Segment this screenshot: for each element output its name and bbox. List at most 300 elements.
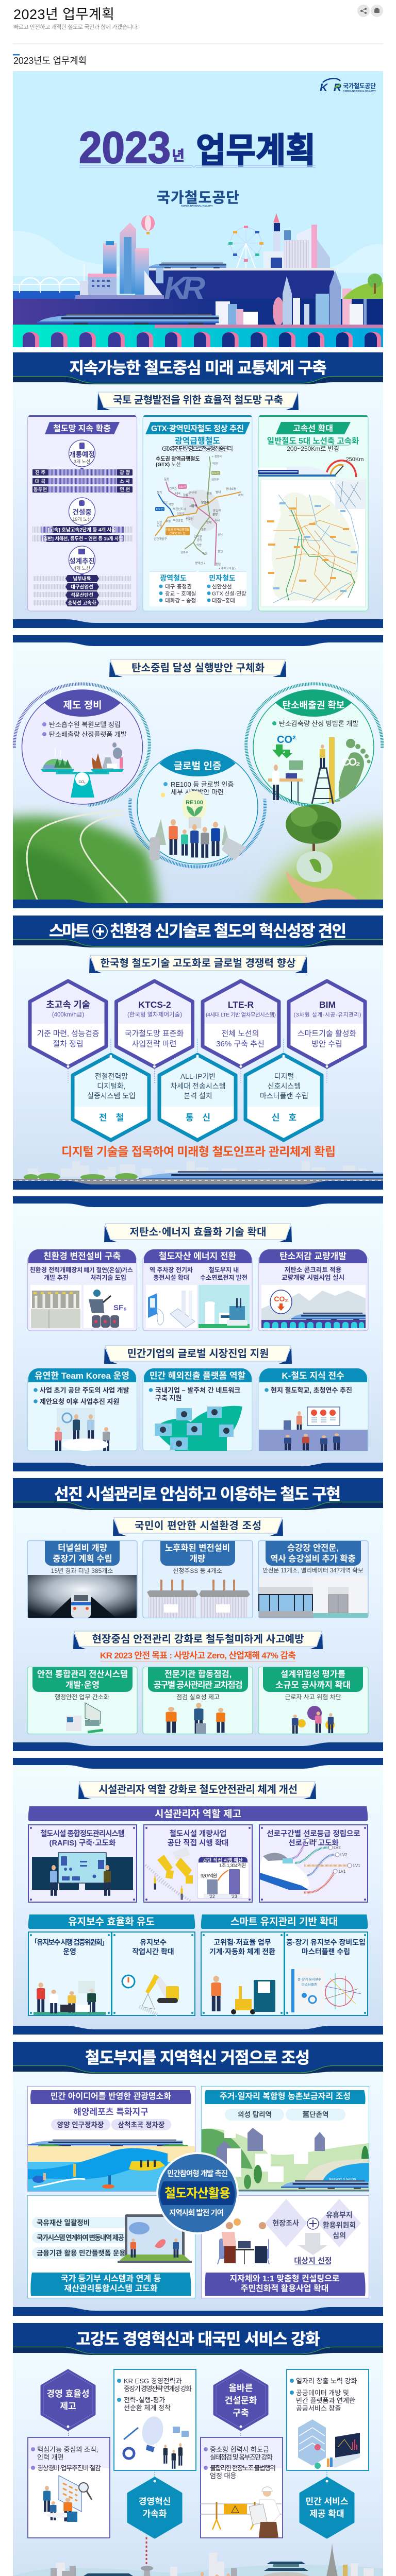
hexagon: signalling: 신호시스템 — [268, 1082, 301, 1090]
map: GTX routes: 마석 — [238, 493, 243, 497]
panel: K-rail knowledge transfer: 현지 철도학교, 초청연수 추진 — [271, 1386, 352, 1394]
map: GTX routes: + 수서고속철도 — [219, 566, 237, 570]
panel: substation: 노후화된 변전설비 — [165, 1543, 230, 1553]
hexagon: BIM: 방안 수립 — [311, 1040, 342, 1048]
hexagon: construction culture: 구축 — [233, 2408, 249, 2418]
illustration: consulting — [218, 2218, 269, 2264]
panel: substation — [143, 1540, 253, 1618]
panel: idle land consulting — [201, 2196, 369, 2298]
illustration: RE100 people — [150, 791, 246, 860]
hexagon: KTCS-2: (한국형 열차제어기술) — [127, 1011, 182, 1018]
ribbon heading — [97, 392, 299, 410]
badge: scheduled opening — [69, 440, 95, 470]
panel: safety system: 개발·운영 — [65, 1680, 100, 1690]
panel: rail asset energy: 철도부지 내 — [209, 1266, 239, 1274]
hexagon: construction culture: 건설문화 — [225, 2396, 257, 2405]
panel: GTX and metropolitan rail: GTX추진단 운영으로 전공정 집중관리 — [162, 445, 233, 452]
illustration: worker and machine — [211, 1976, 275, 2014]
construction bars — [32, 526, 133, 542]
icon: share button — [357, 5, 370, 17]
hexagon: KTCS-2: 사업전략 마련 — [132, 1040, 176, 1048]
illustration: bulb and gear — [124, 2414, 189, 2469]
map: GTX routes: 연신내 — [189, 490, 196, 495]
panel: direct improvement: 철도시설 개량사업 — [170, 1829, 226, 1838]
ribbon heading: 한국형 철도기술 고도화로 글로벌 경쟁력 향상 — [100, 957, 296, 969]
central badge: rail asset utilisation: 민간참여형 개발 촉진 — [167, 2170, 228, 2178]
panel: design risk assessment: 소규모 공사까지 확대 — [275, 1680, 351, 1690]
route bars: 진 주 — [35, 470, 45, 476]
box: ESG strategy: 전략-실행-평가 — [124, 2396, 165, 2404]
panel: marine leisure — [28, 2087, 195, 2192]
list: metropolitan and private rail: 신안산선 — [212, 584, 232, 590]
map: GTX routes: 왕십리 — [213, 509, 221, 513]
hexagon: innovation: 가속화 — [143, 2509, 167, 2519]
illustration: master plan book: 중·장기 유지보수 — [298, 1977, 321, 1981]
hexagon: private service: 민간 서비스 — [306, 2497, 348, 2506]
illustration: analysts — [43, 2476, 92, 2522]
panel: safety system — [27, 1667, 137, 1734]
map: GTX routes: 의정부 — [211, 478, 219, 482]
illustration: risk gears — [292, 1706, 335, 1734]
panel: master plan — [285, 1932, 368, 2015]
illustration: SF6 handling: SF₆ — [113, 1303, 127, 1312]
map: GTX routes: + 청량리 — [212, 454, 222, 459]
map: GTX routes: 인천대입구 — [154, 537, 167, 541]
sub heading: 2023년도 업무계획 — [13, 56, 87, 66]
illustration: city and trains: KR — [164, 270, 205, 306]
hexagon: electrification: 전철전력망 — [95, 1072, 128, 1080]
section: rail land as regional hub — [13, 2042, 383, 2316]
list: metropolitan and private rail: 광교 ~ 호매실 — [165, 590, 196, 597]
diamonds: site survey and committee — [265, 2199, 361, 2247]
hexagon: construction culture: 올바른 — [229, 2383, 253, 2393]
panel: work hours — [112, 1932, 195, 2015]
list: metropolitan and private rail: GTX 신설·연장 — [212, 590, 246, 597]
purple bar heading — [28, 1806, 368, 1821]
teal bar: smart maintenance: 스마트 유지관리 기반 확대 — [230, 1916, 338, 1927]
caption bar — [205, 2273, 366, 2296]
ribbon heading: 현장중심 안전관리 강화로 철두철미하게 사고예방 — [92, 1633, 304, 1645]
badge: design in progress: 4개 노선 — [74, 566, 90, 571]
ribbon heading — [109, 659, 286, 677]
panel: joint inspections: 전문기관 합동점검, — [164, 1669, 232, 1679]
list: metropolitan and private rail: 민자철도 — [209, 574, 236, 582]
list: metropolitan and private rail — [150, 571, 246, 606]
hexagon: LTE-R: 36% 구축 추진 — [216, 1040, 265, 1048]
panel: design risk assessment: 설계위험성 평가를 — [280, 1669, 345, 1679]
illustration: laptop and surveyors — [118, 2214, 192, 2263]
logo: KR — [320, 78, 376, 94]
panel: institution: 탄소흡수원 복원모델 정립 — [49, 721, 121, 728]
hexagon: LTE-R: LTE-R — [228, 999, 254, 1010]
hexagon: LTE-R: 전체 노선의 — [221, 1029, 259, 1038]
section: carbon neutrality — [0, 635, 396, 917]
diamonds: site survey and committee: 심의 — [333, 2231, 346, 2240]
illustration: lecture — [259, 1407, 368, 1451]
hexagon: ultra high speed: (400km/h급) — [52, 1012, 84, 1018]
bar chart: direct budget — [197, 1857, 249, 1899]
panel: marine leisure: 양양 인구정차장 — [57, 2121, 104, 2129]
construction bars: [일반] 서해선, 동두천 ~ 연천 등 15개 사업 — [42, 536, 123, 541]
hero title — [79, 123, 316, 173]
box: public data: 공공서비스 창출 — [296, 2404, 341, 2412]
route bars: 대 곡 — [35, 478, 45, 484]
design routes: 대구산업선 — [71, 584, 93, 590]
panel: carbon credits: 탄소배출권 확보 — [283, 700, 344, 710]
box: ESG strategy: 선순환 체계 정착 — [124, 2404, 171, 2412]
box: ESG strategy: 중장기 경영전략 연계성 강화 — [124, 2385, 192, 2393]
illustration: crane — [122, 1974, 179, 2014]
hexagon: KTCS-2 — [117, 981, 193, 1067]
illustration: station — [259, 1576, 368, 1618]
section heading: 지속가능한 철도중심 미래 교통체계 구축 — [69, 359, 327, 377]
panel: high speed expansion: 일반철도 5대 노선축 고속화 — [267, 436, 359, 446]
diamonds: site survey and committee: 유휴부지 — [326, 2211, 353, 2219]
box: subcontract: 중소형 협력사 하도급 — [210, 2446, 269, 2453]
hexagon: signalling: 신 호 — [272, 1113, 296, 1123]
illustration: beach — [28, 2140, 195, 2191]
panel: eco substation: 개발 추진 — [44, 1274, 69, 1281]
section heading: 철도부지를 지역혁신 거점으로 조성 — [85, 2049, 310, 2067]
box: public data: 일자리 창출 노력 강화 — [296, 2377, 357, 2385]
panel: global certification — [137, 750, 258, 864]
ribbon heading — [113, 1517, 283, 1536]
panel: joint inspections — [143, 1667, 253, 1734]
rail rings — [14, 684, 382, 867]
panel: team Korea: 사업 초기 공단 주도의 사업 개발 — [40, 1386, 129, 1394]
ribbon heading — [104, 1346, 292, 1364]
map: GTX routes: 수도권 광역급행철도 — [165, 528, 190, 532]
hexagon: ultra high speed: 초고속 기술 — [46, 999, 90, 1010]
central badge: rail asset utilisation: 지역사회 발전 기여 — [169, 2209, 224, 2217]
panel: tunnel: 중장기 계획 수립 — [53, 1554, 112, 1564]
route bars: 소 사 — [120, 478, 130, 484]
badge: scheduled opening: 개통예정 — [69, 451, 95, 459]
hexagon: BIM: (3차원 설계-시공-유지관리) — [294, 1012, 361, 1018]
hexagon: KTCS-2: KTCS-2 — [138, 999, 171, 1010]
illustration: CO2 footprint — [268, 734, 370, 804]
right towers — [263, 213, 330, 268]
ribbon heading: 탄소중립 달성 실행방안 구체화 — [131, 662, 265, 674]
hexagon: BIM: 스마트기술 활성화 — [298, 1029, 356, 1038]
map: GTX routes: 여의도 — [177, 512, 185, 516]
section: facility manager role — [13, 1758, 383, 2035]
diamonds: site survey and committee: 활용위원회 — [323, 2221, 356, 2229]
hexagon: LTE-R — [203, 981, 279, 1067]
ribbon heading: 국토 균형발전을 위한 효율적 철도망 구축 — [113, 394, 283, 406]
map: GTX routes: 평택선 + — [195, 561, 205, 565]
map: GTX routes: 상록수 — [180, 550, 188, 554]
list: metropolitan and private rail: 광역철도 — [160, 574, 187, 582]
map: GTX routes: 계양 — [169, 502, 174, 506]
illustration: CO2 footprint: CO₂ — [342, 756, 360, 768]
map: GTX routes: 창동 — [207, 492, 212, 496]
illustration: site engineer and barrier — [201, 2487, 282, 2538]
box: organisation: 핵심기능 중심의 조직, — [37, 2446, 98, 2453]
panel: eco substation: 친환경 변전설비 구축 — [43, 1251, 121, 1261]
hill and trees — [343, 274, 383, 299]
panel: tunnel — [27, 1540, 137, 1618]
panel: substation: 신청주SS 등 4개소 — [173, 1567, 222, 1574]
hexagon: signalling: 마스터플랜 수립 — [260, 1092, 308, 1100]
panel: rural housing: 주거·일자리 복합형 농촌보금자리 조성 — [220, 2092, 351, 2101]
panel: direct improvement: 공단 직접 시행 확대 — [168, 1839, 228, 1848]
teal bar: smart maintenance — [201, 1914, 368, 1929]
map: GTX routes: 삼성 — [212, 512, 218, 516]
illustration: EV charging — [146, 1285, 197, 1328]
map: GTX routes: 검단 — [162, 500, 168, 504]
bar chart: direct budget: '23 — [231, 1894, 237, 1899]
panel: eco substation: 폐기 절연(온실)가스 — [84, 1266, 133, 1274]
design routes: 충북선 고속화 — [68, 600, 96, 606]
section heading: 스마트 — [49, 922, 90, 940]
panel: tunnel: 터널설비 개량 — [58, 1543, 107, 1553]
box: public data — [287, 2369, 369, 2470]
badge: design in progress: 설계추진 — [69, 557, 95, 565]
illustration: city and trains — [13, 213, 383, 347]
panel: track grade: 선로구간별 선로등급 정립으로 — [267, 1829, 360, 1838]
panel: institution: 탄소배출량 산정플랫폼 개발 — [49, 731, 127, 738]
background: tree and globe in hand — [246, 805, 383, 903]
construction bars: [고속] 호남고속2단계 등 4개 사업 — [48, 527, 116, 533]
panel: work hours: 유지보수 — [140, 1938, 167, 1946]
hexagon: LTE-R: (4세대 LTE 기반 열차무선시스템) — [206, 1012, 276, 1018]
box: public data: 민간 플랫폼과 연계한 — [296, 2397, 355, 2404]
panel: work hours: 작업시간 확대 — [132, 1947, 174, 1956]
list: metropolitan and private rail: 대장~홍대 — [212, 597, 235, 604]
panel: marine leisure: 해양레포츠 특화지구 — [73, 2107, 148, 2117]
logo: KR: 국가철도공단 — [343, 82, 376, 90]
panel: maintenance verification committee — [28, 1932, 111, 2015]
map: GTX routes: (GTX) B노선 — [170, 531, 185, 535]
bar chart: direct budget: '22 — [209, 1894, 215, 1899]
illustration: team discussion — [34, 1981, 106, 2015]
illustration: world map — [155, 1406, 242, 1451]
map: GTX routes: 의왕 — [196, 543, 202, 547]
teal bar: maintenance efficiency: 유지보수 효율화 유도 — [68, 1916, 155, 1927]
map: GTX routes — [154, 454, 243, 570]
illustration: CO2 bridge: CO₂ — [274, 1295, 288, 1303]
panel: global certification: 글로벌 인증 — [174, 760, 221, 772]
ribbon heading — [89, 955, 307, 973]
panel: marine leisure: 삼척초곡 정차장 — [118, 2121, 165, 2129]
arches — [23, 332, 381, 347]
panel: overseas platform — [143, 1368, 252, 1451]
organisation name: KOREA NATIONAL RAILWAY — [181, 205, 213, 207]
panel: track grade — [259, 1825, 368, 1902]
panel: eco substation: 친환경 전력개폐장치 — [30, 1266, 82, 1274]
map: GTX routes: 평내호평 — [226, 487, 236, 491]
section heading: 친환경 신기술로 철도의 혁신성장 견인 — [110, 922, 346, 940]
hero title: 업무계획 — [196, 131, 316, 171]
illustration: train and track grades: LV2 — [340, 1853, 348, 1857]
route bars — [32, 469, 133, 493]
badge: design in progress — [69, 546, 95, 576]
map: GTX routes: 수서 — [214, 518, 220, 522]
panel: rural housing — [201, 2087, 369, 2192]
box: subcontract: 실태점검 및 옴부즈만 강화 — [210, 2453, 273, 2461]
map: GTX routes: 운정 — [164, 478, 169, 481]
hexagon: communication: 차세대 전송시스템 — [171, 1082, 225, 1090]
panel: low carbon bridge — [258, 1249, 368, 1331]
panel: asset management system: 국가시스템 연계하여 변동내역 제공 — [37, 2234, 124, 2242]
panel: low carbon bridge: 교량개량 시범사업 실시 — [282, 1274, 344, 1281]
map: GTX routes: 신도림 — [186, 517, 193, 521]
ribbon heading: 민간기업의 글로벌 시장진입 지원 — [127, 1348, 269, 1360]
list: metropolitan and private rail: 태화강 ~ 송정 — [165, 598, 196, 604]
map: GTX routes: 덕정 — [212, 462, 218, 466]
panel: institution — [22, 690, 142, 804]
illustration: train and track grades: LV2 — [334, 1845, 341, 1850]
section heading: 선진 시설관리로 안심하고 이용하는 철도 구현 — [54, 1485, 341, 1503]
hexagon: efficiency: 경영 효율성 — [47, 2389, 89, 2399]
panel: mechanisation — [201, 1932, 284, 2015]
design routes — [33, 575, 131, 606]
panel: design risk assessment: 근로자 사고 위험 차단 — [285, 1693, 341, 1701]
hexagon: ultra high speed — [30, 981, 106, 1067]
map: GTX routes: 용인 — [218, 550, 223, 553]
box: organisation: 인력 개편 — [37, 2453, 63, 2461]
panel: master plan: 중·장기 유지보수 장비도입 — [286, 1938, 366, 1946]
caption bar: 재산관리통합시스템 고도화 — [64, 2284, 158, 2293]
logo: KR: KR — [320, 82, 342, 94]
panel: low carbon bridge: 탄소저감 교량개발 — [279, 1251, 346, 1261]
panel: K-rail knowledge transfer — [258, 1368, 368, 1451]
Lotte tower — [325, 2543, 339, 2576]
map: GTX routes: A노선 — [179, 485, 186, 489]
section: management innovation and public service — [13, 2323, 384, 2576]
panel: maintenance verification committee: 「유지보수 시행 검증위원회」 — [30, 1938, 109, 1946]
panel: track grade: 선로관리 고도화 — [288, 1839, 339, 1848]
purple bar heading: 시설관리자 역할 제고 — [155, 1808, 241, 1820]
illustration: servers and charts — [298, 2419, 360, 2469]
panel: asset management system: 금융기관 활용 민간플랫폼 운용 — [37, 2249, 126, 2257]
section: sustainable rail transport system — [13, 352, 383, 628]
hexagon: efficiency — [42, 2370, 94, 2430]
route bars: 동두천 — [34, 486, 47, 493]
panel: institution: 제도 정비 — [63, 700, 102, 711]
Ferris wheel — [230, 228, 261, 268]
panel: overseas platform: 구축 지원 — [155, 1394, 182, 1402]
travellers — [199, 2572, 236, 2576]
hexagon: BIM: BIM — [319, 999, 336, 1010]
ribbon heading — [73, 1631, 323, 1649]
page subtitle: 빠르고 안전하고 쾌적한 철도로 국민과 함께 가겠습니다. — [13, 23, 139, 30]
badge: scheduled opening: 3개 노선 — [74, 459, 90, 464]
hexagon: efficiency: 제고 — [60, 2401, 76, 2411]
panel: hero cover — [13, 71, 383, 347]
panel: GTX and metropolitan rail: 광역급행철도 — [175, 436, 220, 446]
panel: GTX and metropolitan rail: GTX·광역민자철도 정상 추진 — [151, 424, 244, 433]
panel: RAFIS: (RAFIS) 구축·고도화 — [50, 1839, 116, 1848]
hexagon: construction culture — [214, 2370, 267, 2430]
panel: safety system: 안전 통합관리 전산시스템 — [37, 1669, 128, 1679]
illustration: CO2 footprint: CO² — [277, 734, 296, 745]
logo: KR: KOREA NATIONAL RAILWAY — [343, 90, 376, 92]
hexagon: signalling — [245, 1055, 322, 1140]
panel: rail asset energy: 충전시설 확대 — [153, 1274, 189, 1281]
illustration: green village — [201, 2128, 369, 2191]
box: ESG strategy — [114, 2369, 196, 2470]
map: GTX routes: (GTX) 노선 — [156, 461, 180, 468]
badge: under construction — [69, 498, 95, 528]
panel: rural housing: 의성 탑리역 — [238, 2111, 272, 2119]
map: national rail network — [261, 479, 366, 607]
hexagon: innovation: 경영혁신 — [139, 2497, 171, 2506]
design routes: 석문산단선 — [71, 592, 93, 599]
map: GTX routes: 장기 — [157, 490, 162, 495]
selection label: 대상지 선정 — [294, 2257, 332, 2265]
panel: RAFIS: 철도시설 종합정도관리시스템 — [40, 1829, 125, 1838]
panel: tunnel: 15년 경과 터널 385개소 — [51, 1567, 113, 1574]
illustration: carbon balance — [41, 742, 124, 798]
box: ESG strategy: KR ESG 경영전략과 — [124, 2377, 182, 2385]
illustration: train and track grades — [260, 1838, 360, 1892]
panel: overseas platform: 국내기업 – 발주처 간 네트워크 — [155, 1386, 240, 1394]
panel: high speed expansion — [258, 415, 368, 611]
panel: K-rail knowledge transfer: K-철도 지식 전수 — [282, 1371, 344, 1381]
ribbon heading — [78, 1782, 316, 1799]
hexagon: ultra high speed: 기준 마련, 성능검증 — [37, 1029, 99, 1038]
icon: print button — [371, 5, 383, 17]
design routes: 남부내륙 — [73, 576, 91, 582]
panel: network expansion: 철도망 지속 확충 — [53, 424, 111, 433]
hexagon: communication — [159, 1055, 236, 1140]
section: smart and eco technology — [13, 916, 383, 1190]
section: advanced facility management — [13, 1478, 383, 1751]
route bars: 연 천 — [120, 486, 130, 493]
panel: carbon credits — [253, 690, 374, 804]
hero title: 2023 — [79, 123, 171, 173]
panel: design risk assessment — [258, 1667, 368, 1734]
map: GTX routes: 수원 — [202, 551, 207, 555]
map: GTX routes: 별내 — [216, 490, 221, 494]
map: GTX routes: 양재 — [206, 520, 211, 524]
hexagon: electrification: 전 철 — [99, 1113, 124, 1123]
illustration: carbon balance: CO₂ — [78, 781, 86, 784]
panel: overseas platform: 민간 해외진출 플랫폼 역할 — [150, 1371, 245, 1381]
panel: rail asset energy: 철도자산 에너지 전환 — [159, 1251, 236, 1261]
illustration: master plan book — [291, 1969, 361, 2012]
hexagon: communication: 통 신 — [186, 1113, 210, 1123]
orange conclusion: 디지털 기술을 접목하여 미래형 철도인프라 관리체계 확립 — [61, 1145, 336, 1158]
caption bar — [30, 2273, 191, 2296]
map: GTX routes: 서울역 — [189, 504, 197, 508]
illustration: master plan book: 마스터플랜 — [302, 1982, 317, 1987]
panel: carbon credits: 탄소감축량 산정 방법론 개발 — [279, 720, 358, 727]
section heading: 고강도 경영혁신과 대국민 서비스 강화 — [76, 2330, 320, 2348]
panel: team Korea: 유연한 Team Korea 운영 — [35, 1371, 129, 1381]
panel: platform doors: 안전문 11개소, 엘리베이터 347개역 확보 — [262, 1567, 364, 1574]
panel: platform doors — [258, 1540, 368, 1618]
panel: high speed expansion: 200~250Km로 변경 — [287, 445, 339, 452]
map: GTX routes: D노선 — [156, 507, 163, 511]
hexagon: communication: ALL-IP기반 — [180, 1072, 216, 1080]
panel: mechanisation: 고위험·저효율 업무 — [213, 1938, 271, 1946]
panel: joint inspections: 점검 실효성 제고 — [176, 1693, 220, 1701]
ribbon heading: 저탄소·에너지 효율화 기술 확대 — [130, 1226, 266, 1238]
illustration: skyline with train — [13, 1161, 383, 1190]
map: GTX routes: 동탄 — [216, 562, 221, 566]
central badge: rail asset utilisation: 철도자산활용 — [164, 2187, 230, 2200]
section: low carbon and overseas support — [13, 1196, 383, 1471]
teal bar: maintenance efficiency — [28, 1914, 195, 1929]
panel: RAFIS — [28, 1825, 137, 1902]
panel: eco substation — [28, 1249, 137, 1331]
panel: global certification: RE100 등 글로벌 인증 — [171, 781, 234, 788]
panel: safety system: 행정안전 업무 간소화 — [55, 1693, 109, 1701]
icon: speed gauge and train: 250Km — [346, 456, 364, 463]
